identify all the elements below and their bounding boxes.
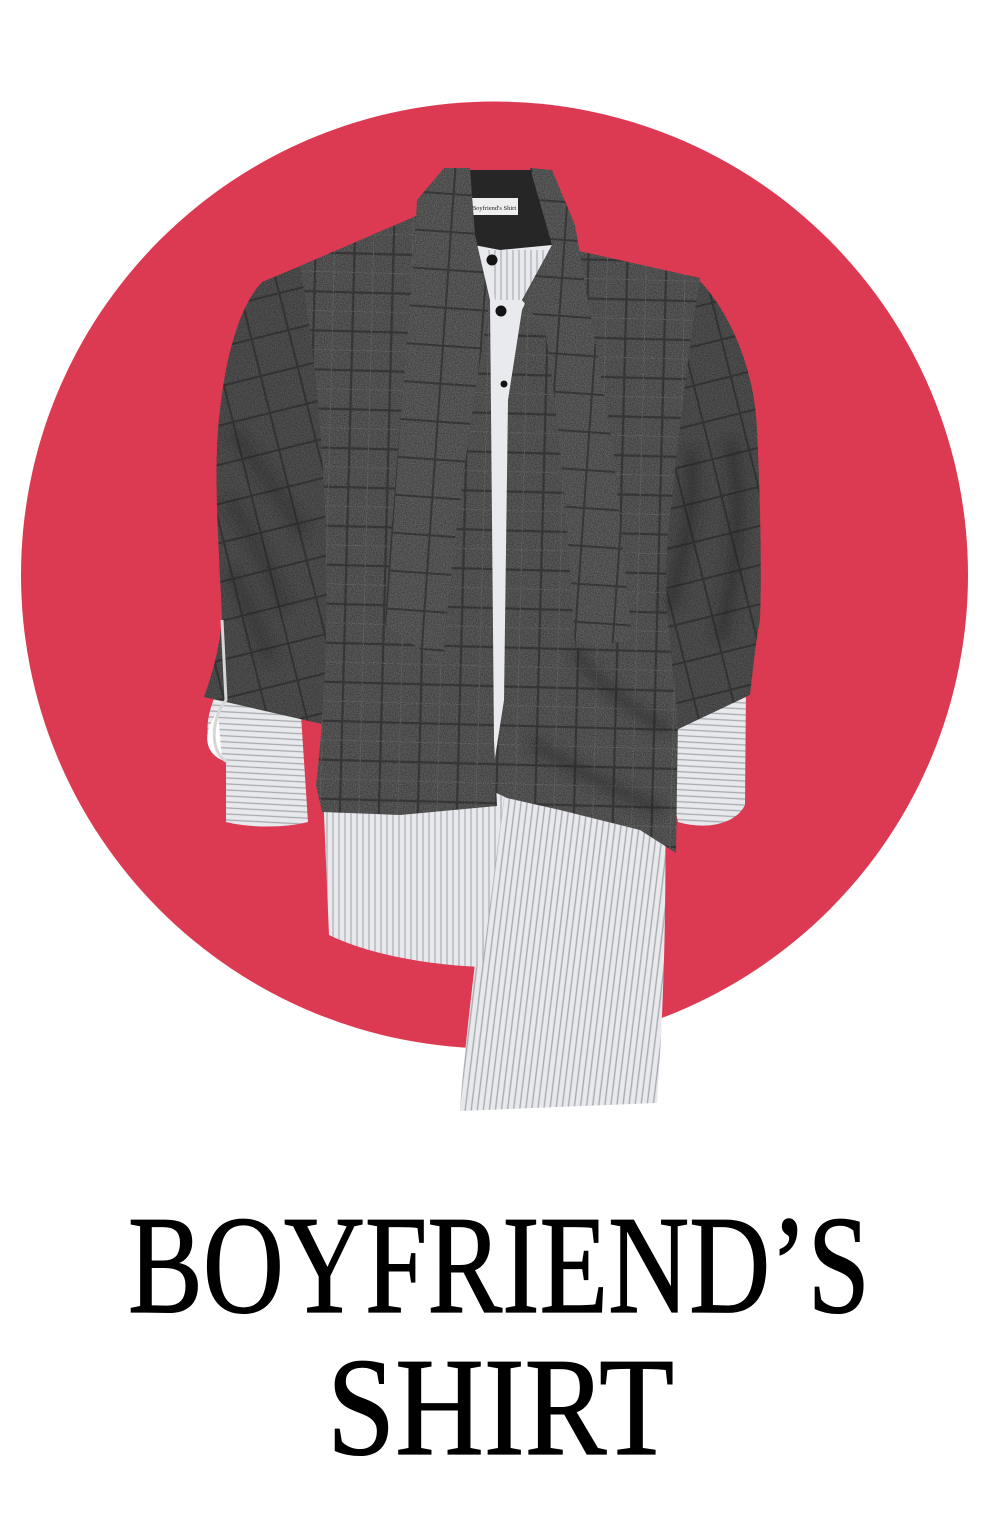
- background circle: [21, 102, 968, 1048]
- right scarf: [522, 168, 632, 648]
- right shirt cuff: [660, 688, 746, 826]
- jacket fabric group: [204, 168, 761, 853]
- neck label: Boyfriend's Shirt: [472, 205, 516, 212]
- neck label: [470, 198, 518, 215]
- sleeve drawstring: [214, 620, 228, 762]
- shirt buttons: [486, 254, 508, 388]
- title line 2: SHIRT: [327, 1330, 674, 1485]
- title: [128, 1188, 870, 1485]
- left shirt cuff: [208, 690, 308, 826]
- jacket left front: [300, 210, 497, 815]
- left scarf: [385, 168, 490, 665]
- illustration: layered shirt and jacket: [204, 168, 761, 1111]
- right sleeve: [650, 276, 761, 732]
- left cuff opening: [207, 712, 222, 760]
- placket stripes: [488, 250, 552, 300]
- jacket right front: [490, 245, 700, 853]
- shirt hem left: [323, 790, 505, 967]
- shirt placket: [470, 235, 556, 800]
- collar interior: [446, 170, 552, 250]
- jacket shading folds: [228, 430, 737, 810]
- long asymmetrical shirt panel: [460, 770, 665, 1111]
- left sleeve: [204, 264, 333, 724]
